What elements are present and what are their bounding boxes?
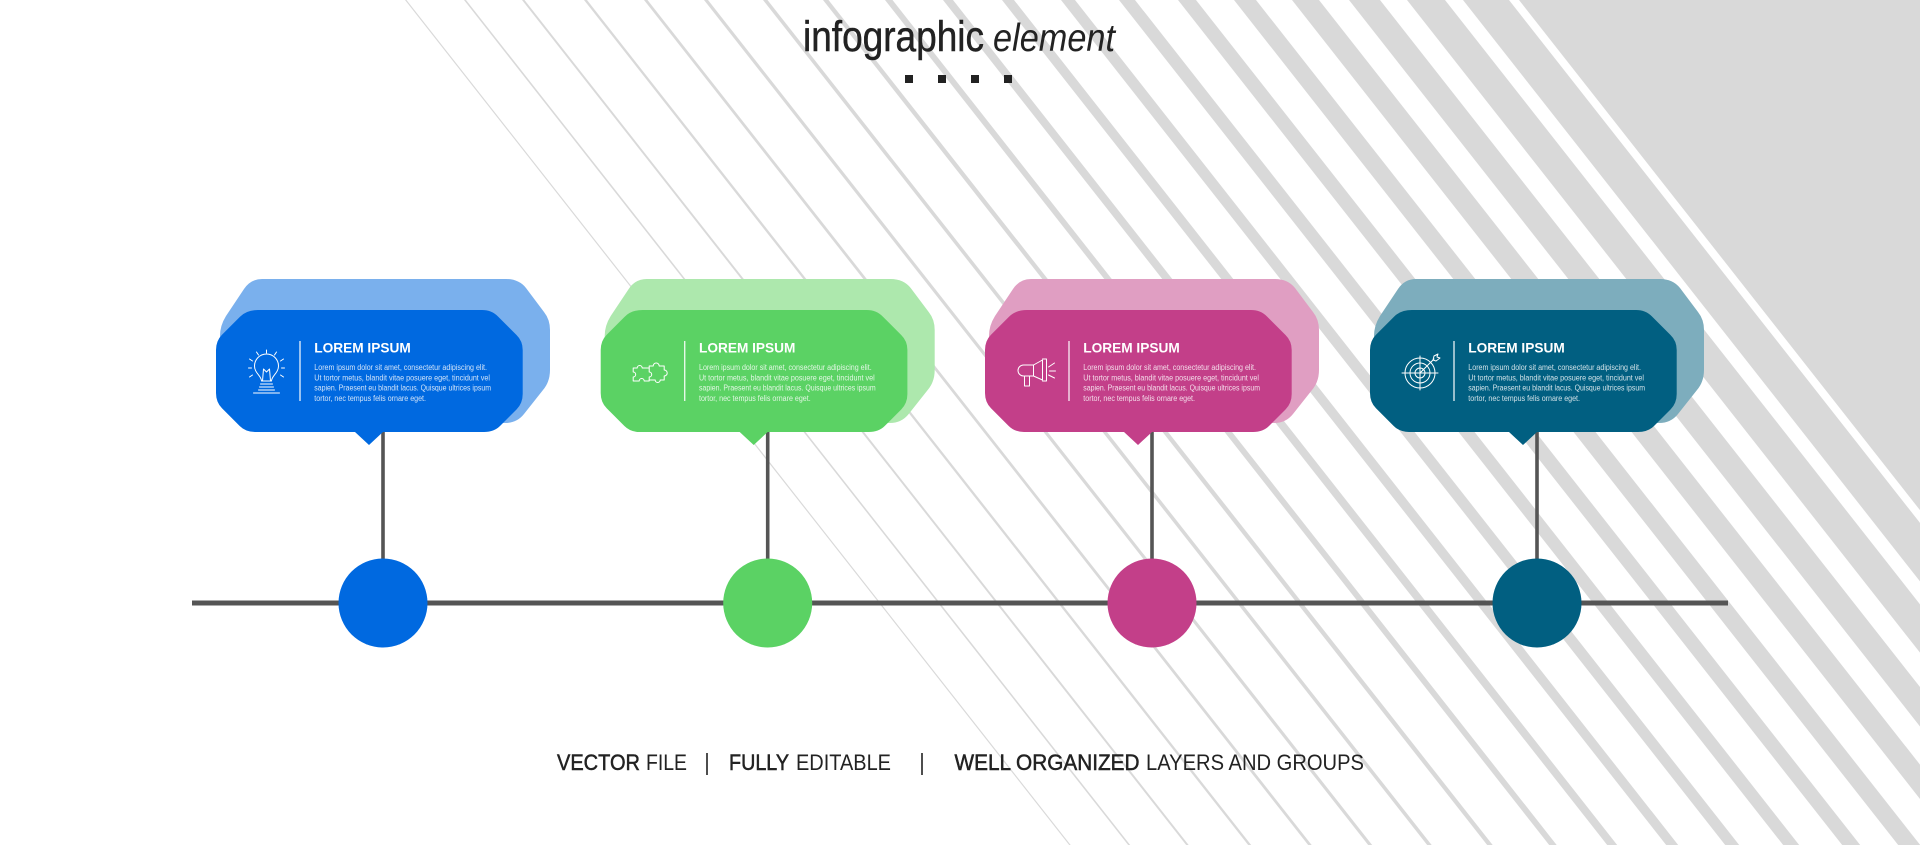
title: infographic: [803, 13, 984, 61]
title: element: [993, 17, 1117, 60]
timeline node: [338, 558, 428, 648]
body text: Ut tortor metus, blandit vitae posuere eget, tincidunt vel: [699, 373, 875, 382]
footer tagline: WELL ORGANIZED: [954, 750, 1140, 775]
body text: Lorem ipsum dolor sit amet, consectetur adipiscing elit.: [314, 363, 487, 372]
title dots: [905, 75, 1012, 83]
body text: tortor, nec tempus felis ornare eget.: [699, 394, 811, 403]
connector stem: [766, 425, 770, 565]
footer tagline: VECTOR: [557, 750, 640, 775]
body text: Ut tortor metus, blandit vitae posuere eget, tincidunt vel: [1468, 373, 1644, 382]
front panel: [216, 310, 523, 445]
divider: [1068, 341, 1070, 401]
step 2: puzzle: [601, 279, 935, 648]
timeline node: [1108, 558, 1196, 648]
body text: tortor, nec tempus felis ornare eget.: [1083, 394, 1195, 403]
footer tagline: EDITABLE: [796, 750, 891, 775]
footer tagline: FULLY: [729, 750, 789, 775]
body text: Lorem ipsum dolor sit amet, consectetur adipiscing elit.: [699, 363, 872, 372]
body text: [1083, 363, 1260, 403]
body text: Ut tortor metus, blandit vitae posuere eget, tincidunt vel: [314, 373, 490, 382]
heading: LOREM IPSUM: [1083, 340, 1180, 356]
divider: [1453, 341, 1455, 401]
body text: [314, 363, 491, 403]
body text: tortor, nec tempus felis ornare eget.: [314, 394, 426, 403]
back panel: [220, 279, 550, 423]
back panel: [605, 279, 935, 423]
body text: [699, 363, 876, 403]
step 3: megaphone: [985, 279, 1319, 648]
timeline node: [1492, 558, 1582, 648]
heading: LOREM IPSUM: [314, 340, 411, 356]
footer tagline: FILE: [646, 750, 687, 775]
divider: [299, 341, 301, 401]
body text: [1468, 363, 1645, 403]
footer tagline: [557, 750, 1364, 775]
icon: megaphone: [1018, 359, 1056, 386]
divider: [684, 341, 685, 401]
footer tagline: LAYERS AND GROUPS: [1146, 750, 1364, 775]
body text: sapien. Praesent eu blandit lacus. Quisque ultrices ipsum: [699, 384, 876, 393]
title: [803, 13, 1117, 61]
body text: sapien. Praesent eu blandit lacus. Quisque ultrices ipsum: [1083, 384, 1260, 393]
connector stem: [1150, 425, 1154, 565]
body text: Lorem ipsum dolor sit amet, consectetur adipiscing elit.: [1468, 363, 1641, 372]
body text: sapien. Praesent eu blandit lacus. Quisque ultrices ipsum: [1468, 384, 1645, 393]
back panel: [989, 279, 1319, 423]
body text: tortor, nec tempus felis ornare eget.: [1468, 394, 1580, 403]
heading: LOREM IPSUM: [1468, 340, 1565, 356]
timeline node: [723, 558, 812, 648]
icon: light bulb: [248, 350, 284, 393]
step 4: target: [1370, 279, 1704, 648]
body text: sapien. Praesent eu blandit lacus. Quisque ultrices ipsum: [314, 384, 491, 393]
icon: target with dart: [1402, 354, 1440, 390]
front panel: [1370, 310, 1677, 445]
body text: Ut tortor metus, blandit vitae posuere eget, tincidunt vel: [1083, 373, 1259, 382]
icon: puzzle pieces: [633, 363, 667, 382]
step 1: idea: [216, 279, 550, 648]
body text: Lorem ipsum dolor sit amet, consectetur adipiscing elit.: [1083, 363, 1256, 372]
connector stem: [1535, 425, 1539, 565]
back panel: [1374, 279, 1704, 423]
timeline axis: [192, 600, 1728, 606]
connector stem: [381, 425, 385, 565]
front panel: [601, 310, 907, 445]
front panel: [985, 310, 1292, 445]
heading: LOREM IPSUM: [699, 340, 795, 356]
